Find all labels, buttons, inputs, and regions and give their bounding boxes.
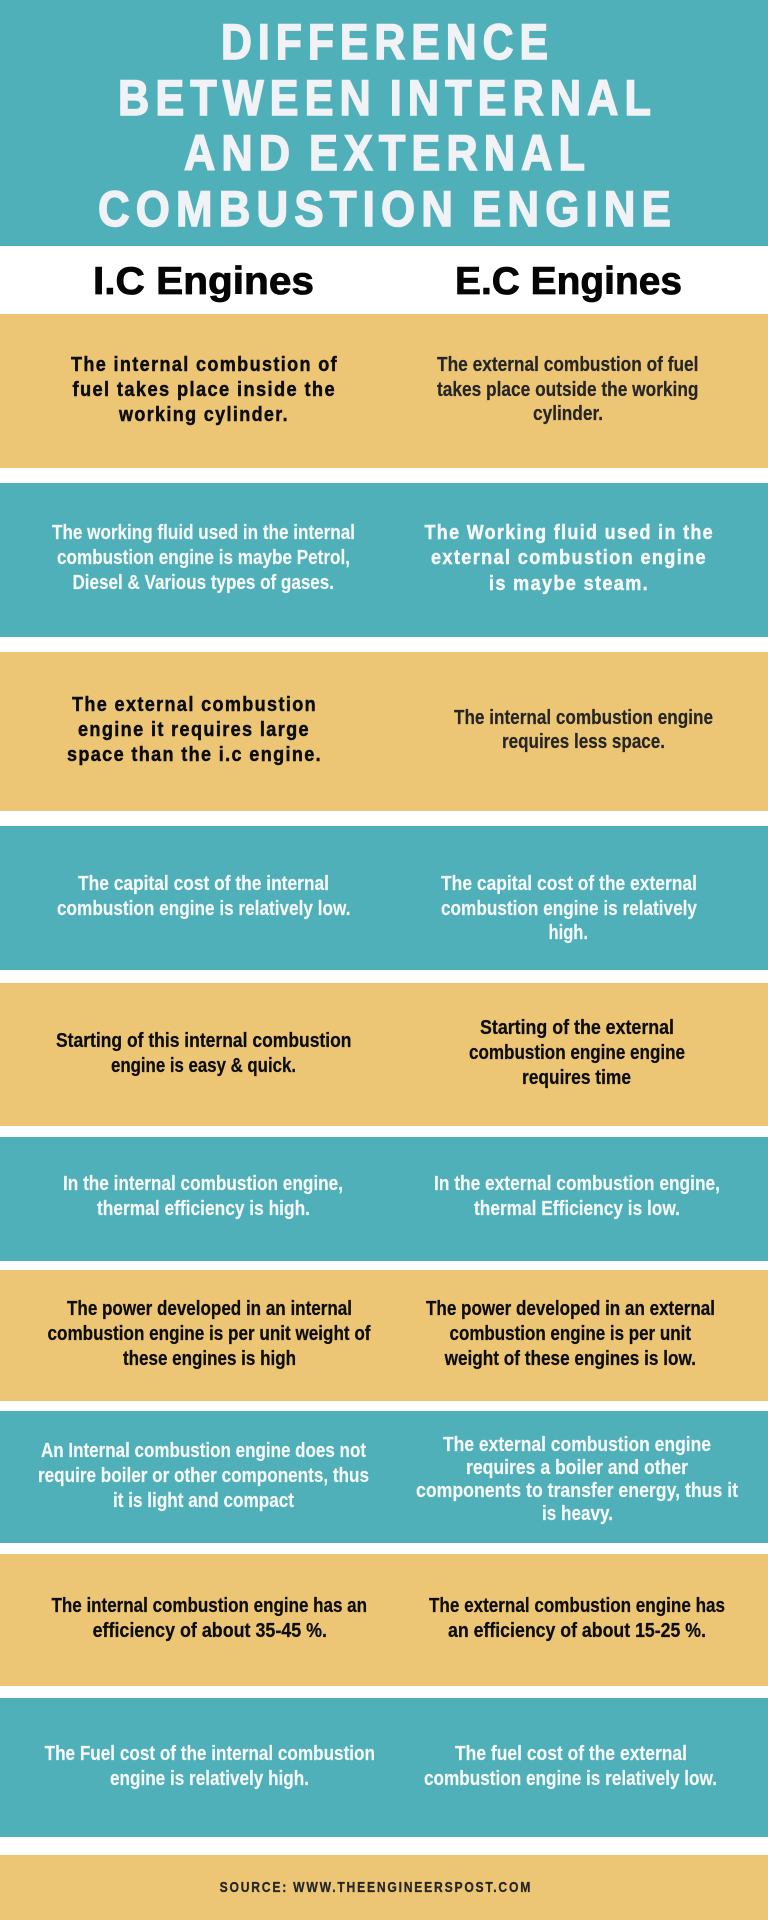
text: I.C thermal efficiency [63,1173,343,1220]
title: AND EXTERNAL [184,125,591,181]
panel: row 5 starting [0,983,768,1126]
panel: row 2 working fluid [0,483,768,637]
text: I.C compactness: require boiler or other components, thus [38,1465,369,1487]
heading: I.C Engines: I.C Engines [93,260,314,303]
text: E.C fuel cost: combustion engine is relatively low. [424,1768,717,1790]
text: E.C efficiency [429,1595,725,1642]
text: E.C thermal efficiency: thermal Efficiency is low. [474,1198,680,1220]
text: E.C starting: requires time [522,1067,631,1089]
text: E.C capital cost: The capital cost of the external [441,873,697,895]
text: E.C combustion location [437,354,698,425]
text: E.C capital cost [441,873,698,944]
text: source: SOURCE: WWW.THEENGINEERSPOST.COM [220,1879,532,1896]
text: E.C thermal efficiency [434,1173,720,1220]
text: I.C combustion location: The internal combustion of [71,354,338,376]
text: E.C power: weight of these engines is low. [444,1348,696,1370]
text: I.C compactness [38,1440,369,1512]
panel: title banner [0,0,768,246]
panel: row 4 capital cost [0,826,768,970]
text: I.C fuel cost [45,1743,375,1790]
text: I.C thermal efficiency: In the internal combustion engine, [63,1173,343,1195]
text: I.C combustion location [71,354,338,426]
text: E.C power: combustion engine is per unit [450,1323,691,1345]
text: E.C starting: Starting of the external [480,1017,674,1039]
text: I.C efficiency: efficiency of about 35-45 %. [93,1620,327,1642]
text: E.C combustion location: takes place outside the working [437,379,698,401]
panel: row 6 thermal efficiency [0,1137,768,1261]
title: BETWEEN INTERNAL [118,70,657,126]
text: E.C power: The power developed in an external [426,1298,715,1320]
text: I.C combustion location: working cylinder. [118,404,289,426]
text: I.C working fluid: combustion engine is maybe Petrol, [57,547,350,569]
text: I.C fuel cost: The Fuel cost of the internal combustion [45,1743,375,1765]
text: E.C thermal efficiency: In the external combustion engine, [434,1173,720,1195]
text: I.C starting: engine is easy & quick. [111,1055,296,1077]
text: I.C space: engine it requires large [78,719,310,741]
text: E.C space: requires less space. [502,731,665,753]
text: I.C fuel cost: engine is relatively high. [110,1768,309,1790]
panel: row 3 space required [0,652,768,811]
text: E.C compactness: The external combustion engine [443,1434,711,1456]
text: I.C starting: Starting of this internal combustion [56,1030,352,1052]
text: I.C efficiency: The internal combustion engine has an [52,1595,367,1617]
panel: row 8 boiler and compactness [0,1411,768,1543]
text: E.C combustion location: The external combustion of fuel [437,354,698,376]
text: I.C combustion location: fuel takes place inside the [72,379,336,401]
text: I.C working fluid: The working fluid used in the internal [52,522,355,544]
text: I.C compactness: An Internal combustion engine does not [41,1440,366,1462]
text: E.C compactness: requires a boiler and other [466,1457,688,1479]
text: I.C working fluid [52,522,355,594]
text: E.C compactness: is heavy. [542,1503,613,1525]
text: E.C working fluid: external combustion engine [431,547,707,569]
text: E.C efficiency: an efficiency of about 15-25 %. [448,1620,706,1642]
text: I.C power: combustion engine is per unit weight of [48,1323,371,1345]
text: E.C fuel cost: The fuel cost of the external [455,1743,687,1765]
text: I.C space [67,694,322,766]
panel: row 7 power per unit weight [0,1270,768,1401]
panel: row 1 working cylinder [0,314,768,468]
text: I.C thermal efficiency: thermal efficiency is high. [97,1198,310,1220]
text: E.C power [426,1298,715,1370]
text: I.C capital cost: combustion engine is relatively low. [57,898,350,920]
text: I.C working fluid: Diesel & Various types of gases. [72,572,334,594]
text: E.C space [454,707,713,753]
text: E.C combustion location: cylinder. [533,403,603,425]
text: I.C efficiency [52,1595,367,1642]
text: E.C starting: combustion engine engine [469,1042,685,1064]
panel: column headings [0,246,768,314]
text: I.C power: The power developed in an internal [67,1298,352,1320]
panel: source footer [0,1855,768,1920]
title: COMBUSTION ENGINE [98,181,677,237]
text: I.C space: The external combustion [72,694,317,716]
title: DIFFERENCE [221,14,554,70]
panel: row 10 fuel cost [0,1698,768,1837]
text: E.C capital cost: combustion engine is relatively [441,898,698,920]
text: E.C space: The internal combustion engine [454,707,713,729]
text: E.C working fluid: is maybe steam. [489,573,649,595]
text: I.C power: these engines is high [123,1348,296,1370]
text: I.C space: space than the i.c engine. [67,744,322,766]
panel: row 9 efficiency [0,1554,768,1686]
text: I.C capital cost [57,873,350,920]
text: E.C fuel cost [424,1743,717,1790]
text: I.C capital cost: The capital cost of the internal [78,873,329,895]
heading: E.C Engines: E.C Engines [455,260,682,303]
text: E.C capital cost: high. [548,922,588,944]
text: E.C working fluid [424,522,714,595]
text: E.C starting [469,1017,685,1089]
text: I.C compactness: it is light and compact [113,1490,294,1512]
text: I.C starting [56,1030,352,1077]
text: E.C compactness [416,1434,738,1525]
text: E.C efficiency: The external combustion engine has [429,1595,725,1617]
title [98,14,677,237]
text: E.C working fluid: The Working fluid used in the [424,522,714,544]
text: I.C power [48,1298,371,1370]
